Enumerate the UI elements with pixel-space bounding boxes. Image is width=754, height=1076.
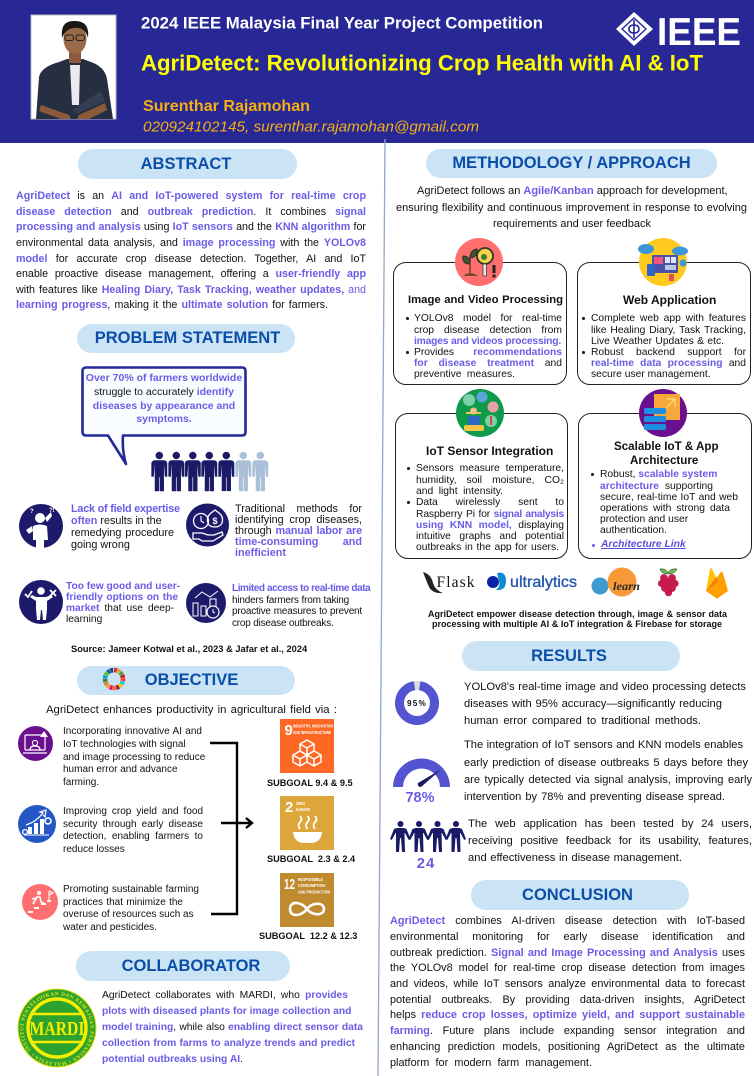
conclusion text: helps reduce crop losses, optimize yield, and support sustainable	[390, 1009, 745, 1021]
SDG 9 tile: 9	[284, 722, 293, 739]
icon: SDG wheel	[102, 668, 126, 690]
conclusion text: AgriDetect combines AI-driven disease detection with IoT-based	[390, 915, 745, 927]
result: gauge 78 percent: 78%	[405, 790, 435, 806]
collaborator text: AgriDetect collaborates with MARDI, who provides	[102, 990, 348, 1001]
conclusion text: enhancing prediction models, positioning AgriDetect as the ultimate	[390, 1041, 745, 1053]
heading: objective	[77, 666, 295, 695]
panel: image and video processing	[393, 238, 567, 385]
heading: Scalable IoT & App	[614, 440, 719, 453]
heading: methodology: METHODOLOGY / APPROACH	[452, 154, 691, 172]
SDG 2 tile: 2	[285, 799, 293, 816]
text: overuse of resources such as	[63, 909, 194, 920]
IEEE logo	[616, 11, 741, 54]
objective item: innovative AI and IoT	[18, 726, 205, 788]
text	[63, 884, 199, 933]
text: proactive measures to prevent	[232, 606, 362, 617]
presenter photo	[30, 14, 116, 120]
icon: plant under magnifier	[455, 238, 503, 286]
abstract text	[16, 190, 366, 311]
result: accuracy donut: 95%	[407, 699, 427, 708]
logo: Flask: Flask	[436, 574, 475, 591]
heading: conclusion: CONCLUSION	[522, 886, 633, 904]
bullet list: humidity, soil moisture, CO₂	[416, 475, 564, 486]
result text: accuracy: human error compared to traditional methods.	[464, 714, 701, 726]
bullet list: protection and user	[600, 514, 688, 525]
text: market that use deep-	[66, 603, 174, 614]
bullet list: for disease treatment and	[414, 358, 562, 369]
card border	[393, 262, 567, 385]
text: Lack of field expertise	[71, 503, 180, 515]
subgoal 9 label: SUBGOAL 9.4 & 9.5	[267, 778, 353, 788]
icon: person with choices	[19, 580, 63, 624]
callout text: Over 70% of farmers worldwide	[86, 372, 242, 384]
text	[235, 503, 362, 559]
abstract text: processing and analysis using IoT sensors and the KNN algorithm for	[16, 221, 366, 233]
text	[63, 726, 205, 788]
bullet list: Live Weather Updates & etc.	[591, 336, 724, 347]
result text: user testing: receiving positive feedback for its usability, features,	[468, 834, 752, 846]
bullet list: using KNN model, displaying	[416, 520, 564, 531]
text: Improving crop yield and food	[63, 806, 203, 817]
source citation: Source: Jameer Kotwal et al., 2023 & Jafar et al., 2024	[71, 644, 307, 654]
heading: abstract	[78, 149, 297, 179]
logo: Firebase	[705, 566, 729, 599]
text: learning	[66, 614, 102, 625]
SDG 9 tile	[280, 719, 334, 773]
text: often results in the	[71, 515, 162, 527]
text: farming.	[63, 777, 99, 788]
text: IoT technologies with signal	[63, 739, 186, 750]
technology caption: processing with multiple AI & IoT integration & Firebase for storage	[432, 619, 722, 629]
project title: AgriDetect: Revolutionizing Crop Health with AI & IoT	[141, 50, 704, 76]
heading	[614, 440, 716, 468]
icon: steps to goal	[22, 884, 58, 920]
SDG 2 tile	[280, 796, 334, 850]
icon: web dashboard and clouds	[639, 238, 687, 286]
conclusion text: and videos, while IoT sensors analyze environmental data to forecast	[390, 978, 745, 990]
abstract text: model for accurate crop disease detection. Together, AI and IoT	[16, 253, 366, 265]
SDG 12 tile: 12	[284, 877, 295, 893]
text: going wrong	[71, 538, 130, 550]
icon: confused person	[19, 504, 63, 548]
heading: objective: OBJECTIVE	[145, 671, 238, 689]
text: Promoting sustainable farming	[63, 884, 199, 895]
heading: conclusion	[471, 880, 689, 910]
SDG 12 tile: RESPONSIBLE	[298, 877, 323, 882]
methodology intro text: AgriDetect follows an Agile/Kanban approach for development,	[417, 185, 728, 197]
text: through manual labor are	[235, 525, 362, 537]
abstract text: enable proactive disease management, offering a user-friendly app	[16, 268, 366, 280]
bullet list: secure, real-time IoT and web	[600, 492, 738, 503]
result text: user testing	[468, 816, 752, 866]
panel: IoT sensor integration	[395, 389, 568, 559]
heading: problem statement: PROBLEM STATEMENT	[95, 329, 280, 347]
heading: Web Application	[623, 293, 716, 307]
callout text: symptoms.	[136, 413, 192, 425]
architecture link: Architecture Link	[601, 539, 686, 550]
bullet list: secure user management.	[591, 369, 711, 380]
collaborator text	[102, 988, 363, 1068]
text: time-consuming and	[235, 536, 362, 548]
text: security through early disease	[63, 819, 203, 830]
bullet list: Sensors measure temperature,	[416, 463, 564, 474]
collaborator text: plots with diseased plants for image collection and	[102, 1006, 351, 1017]
bullet list: authentication.	[600, 525, 667, 536]
abstract text: with features like Healing Diary, Task Tracking, weather updates, and	[16, 284, 366, 296]
bullet list: Robust, scalable system	[600, 469, 717, 480]
SDG 2 tile: ZERO	[296, 801, 305, 806]
card border	[577, 262, 751, 385]
bullet list: Data wirelessly sent to	[416, 497, 564, 508]
icon: chart with clock	[186, 583, 226, 623]
icon: row of farmers, 70 percent highlighted	[151, 452, 268, 492]
result text: early prediction	[464, 737, 752, 807]
bullet list	[395, 463, 568, 555]
heading: IoT Sensor Integration	[426, 444, 553, 458]
text: crop disease outbreaks.	[232, 618, 334, 629]
bracket and arrow to SDG goals	[210, 742, 254, 916]
author name: Surenthar Rajamohan	[143, 98, 310, 115]
panel: scalable IoT and app architecture	[578, 389, 752, 559]
result text: early prediction: The integration of IoT sensors and KNN models enables	[464, 739, 743, 751]
abstract text: disease detection and outbreak prediction. It combines signal	[16, 206, 366, 218]
card border	[395, 413, 568, 559]
text: inefficient	[235, 547, 286, 559]
heading: results	[462, 641, 680, 671]
author contact: 020924102145, surenthar.rajamohan@gmail.com	[143, 120, 479, 136]
methodology intro text	[396, 183, 747, 232]
text: Traditional methods for	[235, 503, 362, 515]
objective item: crop yield	[18, 805, 203, 855]
logo: Flask	[421, 571, 477, 595]
bullet list: real-time data processing and	[591, 358, 746, 369]
panel: web application	[577, 238, 751, 385]
bullet list	[578, 469, 752, 553]
icon: money and time: $	[212, 516, 218, 526]
callout text	[86, 372, 242, 425]
abstract text: learning progress, making it the ultimate solution for farmers.	[16, 299, 328, 311]
result text: accuracy	[464, 678, 746, 730]
result: accuracy donut	[394, 680, 440, 726]
text: practices that minimize the	[63, 897, 183, 908]
bullet list: like Healing Diary, Task Tracking,	[591, 325, 746, 336]
bullet list: and light intensity.	[416, 486, 503, 497]
result text: user testing: The web application has been tested by 24 users,	[468, 818, 752, 830]
callout text: diseases by appearance and	[93, 400, 235, 412]
technology caption: AgriDetect empower disease detection through, image & sensor data	[428, 609, 727, 619]
bullet list: operations with strong data	[600, 503, 730, 514]
icon: farmer with sensors	[456, 389, 504, 437]
bullet list	[577, 313, 751, 381]
text	[66, 581, 180, 625]
collaborator text: collection from farms to analyze trends and predict	[102, 1038, 355, 1049]
conclusion text: outbreak prediction. Signal and Image Processing and Analysis uses	[390, 947, 745, 959]
conclusion text	[390, 914, 745, 1071]
text	[232, 583, 371, 629]
result text: early prediction: are typically detected via signal analysis, improving early	[464, 774, 752, 786]
heading: results: RESULTS	[531, 647, 607, 665]
methodology intro text: ensuring flexibility and continuous improvement in response to evolving	[396, 202, 747, 214]
text: identifying crop diseases,	[235, 514, 362, 526]
heading: Architecture	[630, 454, 698, 467]
SDG 12 tile: AND PRODUCTION	[298, 890, 330, 894]
logo: Raspberry Pi	[657, 568, 680, 597]
bullet list: preventive measures.	[414, 369, 515, 380]
bullet list: outbreaks in the app for users.	[416, 542, 559, 553]
conclusion text: the YOLOv8 model for real-time crop disease detection from images	[390, 962, 745, 974]
callout: 70% of farmers	[81, 366, 247, 466]
technology caption	[428, 609, 727, 629]
objective item: sustainable farming	[22, 884, 199, 933]
bullet list: architecture supporting	[600, 481, 713, 492]
collaborator text: potential outbreaks using AI.	[102, 1054, 243, 1065]
bullet list: YOLOv8 model for real-time	[414, 313, 562, 324]
result: gauge 78 percent	[392, 757, 452, 805]
problem: lack of expertise	[19, 503, 180, 550]
heading: collaborator: COLLABORATOR	[122, 957, 260, 975]
heading: abstract: ABSTRACT	[141, 155, 231, 173]
icon: growth chart	[18, 805, 56, 843]
competition title: 2024 IEEE Malaysia Final Year Project Competition	[141, 14, 543, 32]
bullet list	[393, 313, 567, 381]
collaborator text: model training, while also enabling direct sensor data	[102, 1022, 363, 1033]
result: 24 users	[391, 821, 465, 871]
icon: scaling server	[639, 389, 687, 437]
text	[63, 806, 203, 855]
icon: AI monitor	[18, 726, 53, 761]
result: 24 users: 24	[417, 855, 435, 872]
bullet list: Provides recommendations	[414, 347, 562, 358]
heading: problem statement	[77, 324, 295, 353]
icon: confused person: ?!	[49, 508, 55, 514]
SDG 12 tile: CONSUMPTION	[298, 883, 325, 888]
bullet list: images and videos processing.	[414, 336, 561, 347]
text	[71, 503, 180, 550]
SDG 9 tile: AND INFRASTRUCTURE	[293, 730, 331, 735]
text: reduce losses	[63, 844, 125, 855]
heading: collaborator	[76, 951, 290, 981]
icon: confused person: ?	[30, 509, 34, 515]
conclusion text: farming. Future plans include expanding sensor integration and	[390, 1025, 745, 1037]
bullet list: Robust backend support for	[591, 347, 746, 358]
callout text: struggle to accurately identify	[94, 386, 234, 398]
text: water and pesticides.	[63, 922, 157, 933]
text: friendly options on the	[66, 592, 178, 603]
result text: early prediction: early prediction of disease outbreaks 5 days before they	[464, 757, 748, 769]
SDG 12 tile	[280, 873, 334, 927]
heading: Image and Video Processing	[408, 294, 563, 306]
SDG 2 tile: HUNGER	[296, 807, 311, 812]
logo: ultralytics	[487, 571, 579, 593]
abstract text: environmental data analysis, and image processing with the YOLOv8	[16, 237, 366, 249]
objective intro text: AgriDetect enhances productivity in agricultural field via :	[46, 704, 337, 716]
text: Too few good and user-	[66, 581, 180, 592]
bullet list: Raspberry Pi for signal analysis	[416, 509, 564, 520]
problem: too few options	[19, 580, 180, 625]
icon: money and time	[186, 504, 229, 546]
result text: accuracy: YOLOv8's real-time image and video processing detects	[464, 680, 746, 692]
text: and image processing to reduce	[63, 752, 205, 762]
text: detection, enabling farmers to	[63, 831, 203, 842]
logo: ultralytics: ultralytics	[510, 574, 577, 591]
methodology intro text: requirements and user feedback	[493, 218, 651, 230]
bullet list: crop disease detection from	[414, 325, 562, 336]
header banner	[0, 0, 754, 143]
heading: methodology	[426, 149, 717, 178]
conclusion text: potential outbreaks. By providing data-driven insights, AgriDetect	[390, 994, 745, 1006]
IEEE logo: IEEE	[657, 11, 741, 54]
text: remedying procedure	[71, 527, 174, 539]
speech bubble shape	[81, 366, 247, 466]
logo: scikit-learn: learn	[613, 579, 640, 593]
card border	[578, 413, 752, 559]
result text: early prediction: intervention by 78% and preventing disease spread.	[464, 791, 725, 803]
SDG 9 tile: INDUSTRY, INNOVATION	[293, 724, 333, 728]
bullet list: intuitive graphs and potential	[416, 531, 564, 542]
problem: limited real-time data	[186, 583, 371, 629]
result text: accuracy: diseases with 95% accuracy—significantly reducing	[464, 698, 722, 710]
bullet list: Complete web app with features	[591, 313, 746, 324]
text: Limited access to real-time data	[232, 583, 370, 594]
result text: user testing: and effectiveness in disease management.	[468, 852, 682, 864]
subgoal 2 label: SUBGOAL 2.3 & 2.4	[267, 854, 355, 864]
conclusion text: platform for modern farm management.	[390, 1057, 592, 1069]
logo: MARDI: MARDI	[30, 1018, 85, 1040]
text: hinders farmers from taking	[232, 595, 349, 606]
text: human error and advance	[63, 764, 178, 775]
conclusion text: environmental monitoring for early disease identification and	[390, 931, 745, 943]
text: Incorporating innovative AI and	[63, 726, 202, 737]
problem: traditional methods	[186, 503, 362, 559]
subgoal 12 label: SUBGOAL 12.2 & 12.3	[259, 931, 357, 941]
logo: MARDI: INSTITUT PENYELIDIKAN DAN KEMAJUAN PERTANIAN • MALAYSIA •	[20, 992, 94, 1066]
logo: scikit-learn	[591, 567, 643, 597]
abstract text: AgriDetect is an AI and IoT-powered system for real-time crop	[16, 190, 366, 202]
